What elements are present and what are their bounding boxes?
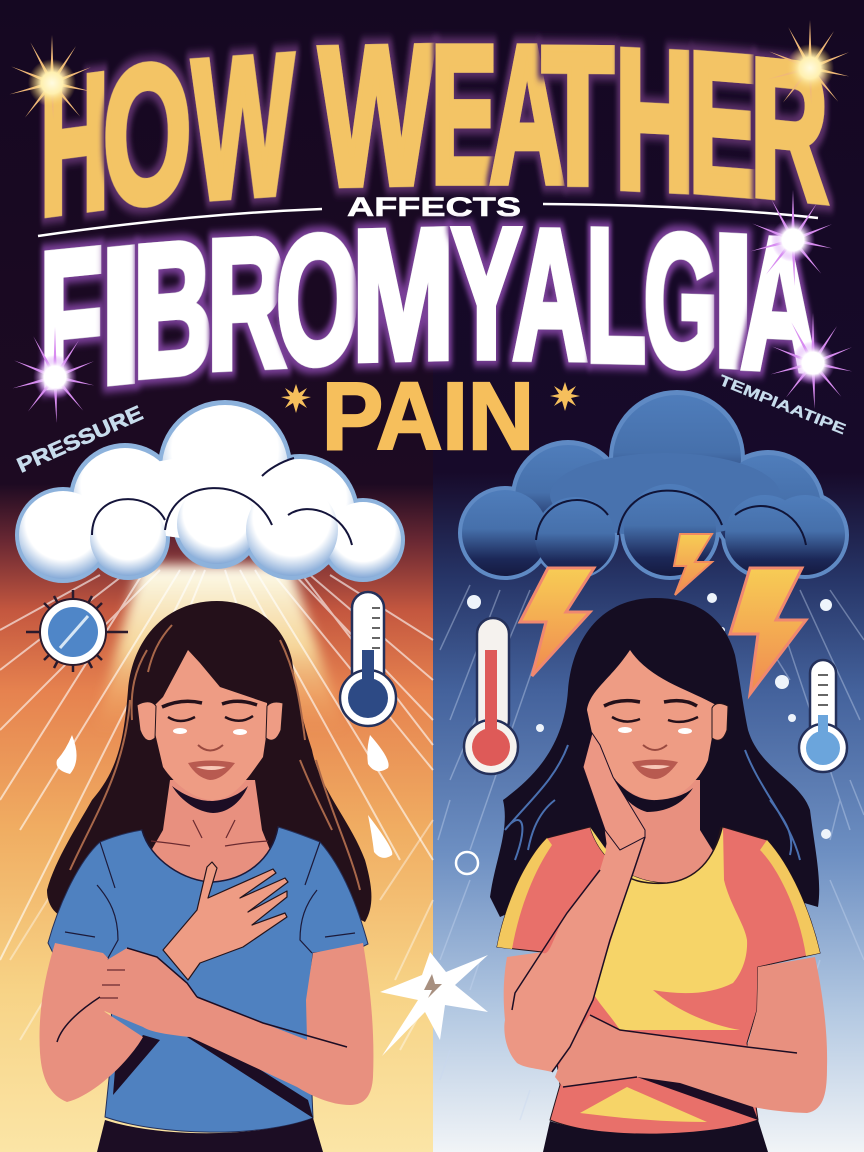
- title: FIBROMYALGIA: A: [740, 198, 818, 411]
- drops: right panel: [467, 593, 832, 839]
- title: HOW WEATHER: H: [40, 34, 109, 257]
- lightning bolt: left: [520, 568, 594, 676]
- title: FIBROMYALGIA: I: [100, 206, 143, 426]
- woman right: [490, 598, 827, 1152]
- shadows under arms: [113, 1035, 313, 1118]
- chest lines: [151, 820, 268, 846]
- face: [153, 650, 268, 800]
- title: HOW WEATHER: R: [750, 17, 828, 244]
- chin shadow: [613, 777, 693, 812]
- sleeve yellow edge left: [497, 838, 552, 949]
- collar line: [630, 827, 721, 883]
- title: FIBROMYALGIA: G: [644, 197, 718, 407]
- white cloud: [15, 400, 405, 583]
- hair highlights: [505, 745, 800, 860]
- pants: [97, 1118, 323, 1152]
- sparkle: right purple lower: [770, 313, 853, 409]
- drops: left panel: [57, 735, 392, 858]
- sparkle burst between panels: [380, 952, 488, 1056]
- title: HOW WEATHER: H: [615, 8, 694, 234]
- hair: [47, 601, 371, 922]
- title: FIBROMYALGIA: I: [712, 193, 755, 408]
- background: right cool panel: [433, 0, 864, 1152]
- sparkle: left purple: [12, 327, 95, 423]
- hair highlights: [70, 625, 360, 890]
- title: HOW WEATHER: [40, 3, 828, 257]
- sleeve yellow edge right: [760, 840, 820, 956]
- title: HOW WEATHER: O: [103, 22, 192, 249]
- rain streaks: right panel: [438, 585, 864, 1120]
- hand finger overlay: [583, 733, 645, 850]
- neck: [600, 780, 725, 900]
- forearm lines: [57, 948, 347, 1047]
- title: HOW WEATHER: E: [688, 10, 758, 238]
- sun rays: left panel: [0, 570, 433, 1050]
- title: FIBROMYALGIA: A: [512, 190, 588, 398]
- title: FIBROMYALGIA: R: [207, 199, 286, 409]
- light beam below white cloud: [95, 565, 345, 730]
- icon: thermometer left panel: [340, 592, 396, 726]
- title: FIBROMYALGIA: B: [133, 200, 212, 417]
- eyes brows nose mouth: [162, 701, 257, 721]
- pants: [543, 1120, 768, 1152]
- shirt: [497, 827, 820, 1135]
- woman left: [40, 601, 373, 1152]
- icon: thermometer right panel red: [464, 618, 518, 774]
- subtitle: AFFECTS with rules: [38, 192, 818, 236]
- ring bubble: [456, 852, 478, 874]
- ears: [137, 702, 283, 741]
- sparkle: right purple upper: [750, 190, 833, 286]
- eyes brows nose mouth: [604, 701, 698, 722]
- star icon left of PAIN: [281, 384, 311, 413]
- title: HOW WEATHER: T: [542, 7, 614, 226]
- title: FIBROMYALGIA: [40, 189, 818, 428]
- label: PRESSURE: PRESSURE: [14, 402, 146, 478]
- title: FIBROMYALGIA: L: [586, 189, 646, 401]
- sparkle: top right: [767, 20, 850, 104]
- icon: barometer sun: [26, 590, 128, 672]
- shirt yellow panel: [590, 827, 747, 1030]
- hand on chest: [163, 862, 288, 980]
- shirt fold lines: [65, 842, 355, 958]
- title: FIBROMYALGIA: M: [352, 190, 454, 400]
- arm raised to cheek: [504, 733, 645, 1072]
- lightning bolt: small: [674, 534, 712, 595]
- title: HOW WEATHER: E: [431, 4, 498, 224]
- arm right and forearm: [98, 943, 373, 1105]
- title: HOW WEATHER: W: [319, 3, 434, 227]
- collar line: [142, 827, 278, 882]
- star icon right of PAIN: [550, 382, 580, 411]
- dark storm cloud: [458, 390, 849, 580]
- icon: thermometer right panel blue: [799, 660, 847, 772]
- shirt yellow hem swoosh: [580, 1087, 707, 1122]
- hair: [490, 598, 819, 917]
- chin shadow: [172, 786, 248, 813]
- label: TEMPERATURE misprint: TEMPIAATIPE: [717, 372, 848, 438]
- arm left: [40, 943, 143, 1102]
- background: left warm panel: [0, 0, 433, 1152]
- title: HOW WEATHER: A: [490, 6, 565, 224]
- waist arm shadow: [637, 1077, 758, 1120]
- arm outlines: [512, 837, 797, 1087]
- shirt: [48, 827, 368, 1132]
- heading: PAIN: PAIN: [322, 363, 534, 470]
- sparkle: top left: [9, 35, 92, 119]
- subtitle: AFFECTS with rules: AFFECTS: [347, 192, 521, 222]
- lightning bolt: right: [730, 568, 806, 694]
- neck: [140, 780, 278, 890]
- title: FIBROMYALGIA: O: [276, 196, 359, 404]
- ear: [712, 703, 728, 740]
- face: [587, 650, 716, 800]
- title: HOW WEATHER: W: [192, 12, 293, 241]
- arm across waist: [555, 957, 827, 1113]
- title: FIBROMYALGIA: Y: [452, 190, 521, 396]
- title: FIBROMYALGIA: F: [40, 207, 103, 428]
